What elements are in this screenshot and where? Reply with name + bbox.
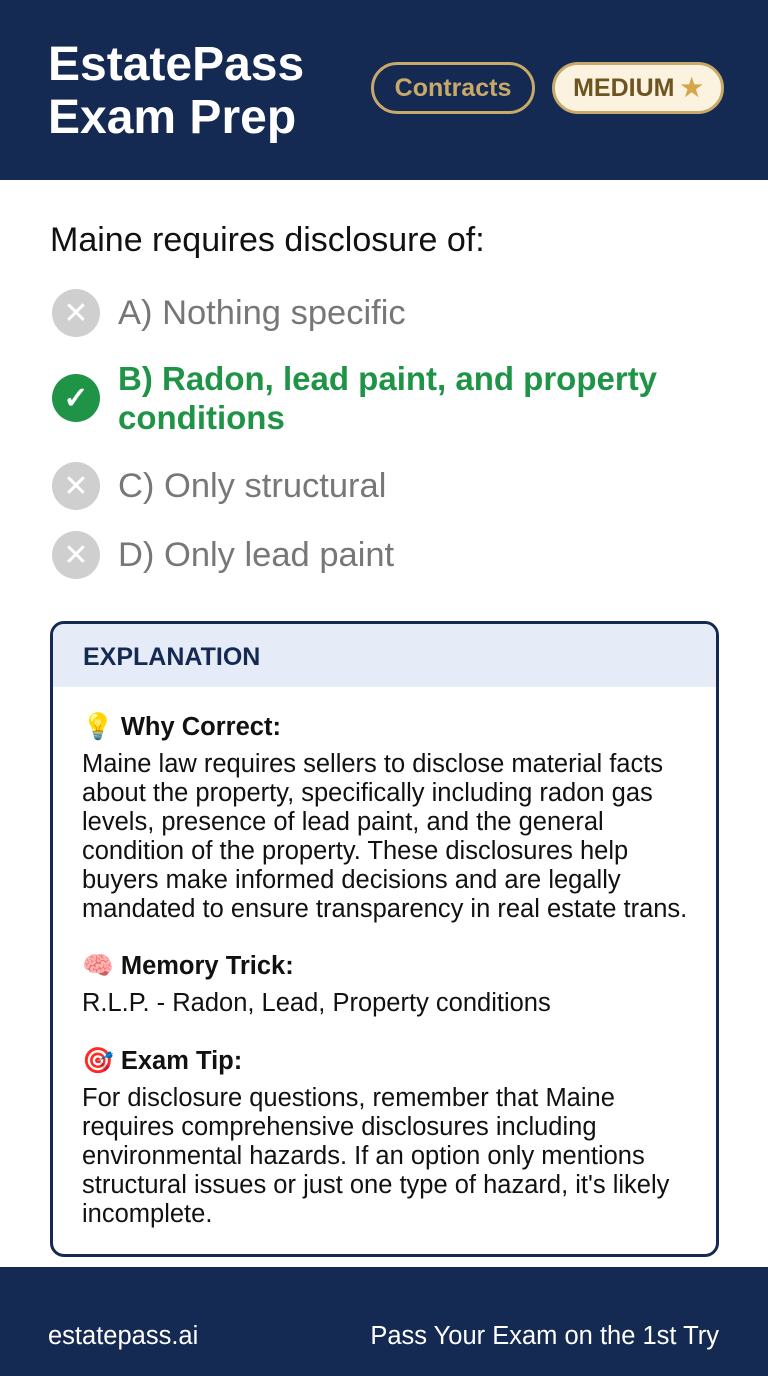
explanation body: about the property, specifically including radon gas [82, 779, 653, 807]
option D: ✕ [63, 538, 89, 572]
footer url: estatepass.ai [48, 1322, 198, 1350]
explanation body: condition of the property. These disclosures help [82, 837, 628, 865]
explanation header: EXPLANATION [83, 643, 260, 671]
explanation body: mandated to ensure transparency in real estate trans. [82, 895, 687, 923]
option D: D) Only lead paint [118, 536, 394, 574]
option B correct: B) Radon, lead paint, and property [118, 360, 657, 397]
option B correct: conditions [118, 399, 285, 436]
option C [52, 462, 386, 510]
explanation body: Maine law requires sellers to disclose material facts [82, 750, 663, 778]
footer [0, 1267, 768, 1376]
title: Exam Prep [48, 91, 296, 144]
question: Maine requires disclosure of: [50, 221, 485, 259]
explanation body: requires comprehensive disclosures including [82, 1113, 597, 1141]
option A: ✕ [63, 296, 89, 330]
footer tagline: Pass Your Exam on the 1st Try [370, 1322, 719, 1350]
header bar [0, 0, 768, 180]
explanation body: incomplete. [82, 1200, 212, 1228]
pill: difficulty: ★ [680, 74, 703, 102]
explanation header [53, 624, 716, 687]
option B correct [52, 360, 657, 436]
option A: A) Nothing specific [118, 294, 406, 332]
option C: ✕ [63, 470, 89, 502]
explanation body: R.L.P. - Radon, Lead, Property conditions [82, 989, 551, 1017]
pill: difficulty [552, 62, 724, 114]
explanation body: 🎯 Exam Tip: [82, 1047, 242, 1075]
explanation body: buyers make informed decisions and are legally [82, 866, 621, 894]
title: EstatePass [48, 38, 304, 91]
option C: C) Only structural [118, 466, 386, 504]
explanation body: For disclosure questions, remember that Maine [82, 1084, 615, 1112]
option B correct: ✓ [63, 382, 89, 414]
explanation panel [50, 621, 719, 1257]
option A [52, 289, 406, 337]
explanation body [82, 712, 687, 1228]
explanation body: levels, presence of lead paint, and the general [82, 808, 604, 836]
pill: difficulty: MEDIUM [573, 74, 674, 102]
pill: category: Contracts [395, 74, 511, 102]
pill: category [371, 62, 535, 114]
explanation body: 🧠 Memory Trick: [82, 952, 294, 980]
explanation body: 💡 Why Correct: [82, 713, 281, 741]
explanation body: structural issues or just one type of hazard, it's likely [82, 1171, 669, 1199]
explanation body: environmental hazards. If an option only mentions [82, 1142, 645, 1170]
title [48, 38, 304, 144]
option D [52, 531, 394, 579]
